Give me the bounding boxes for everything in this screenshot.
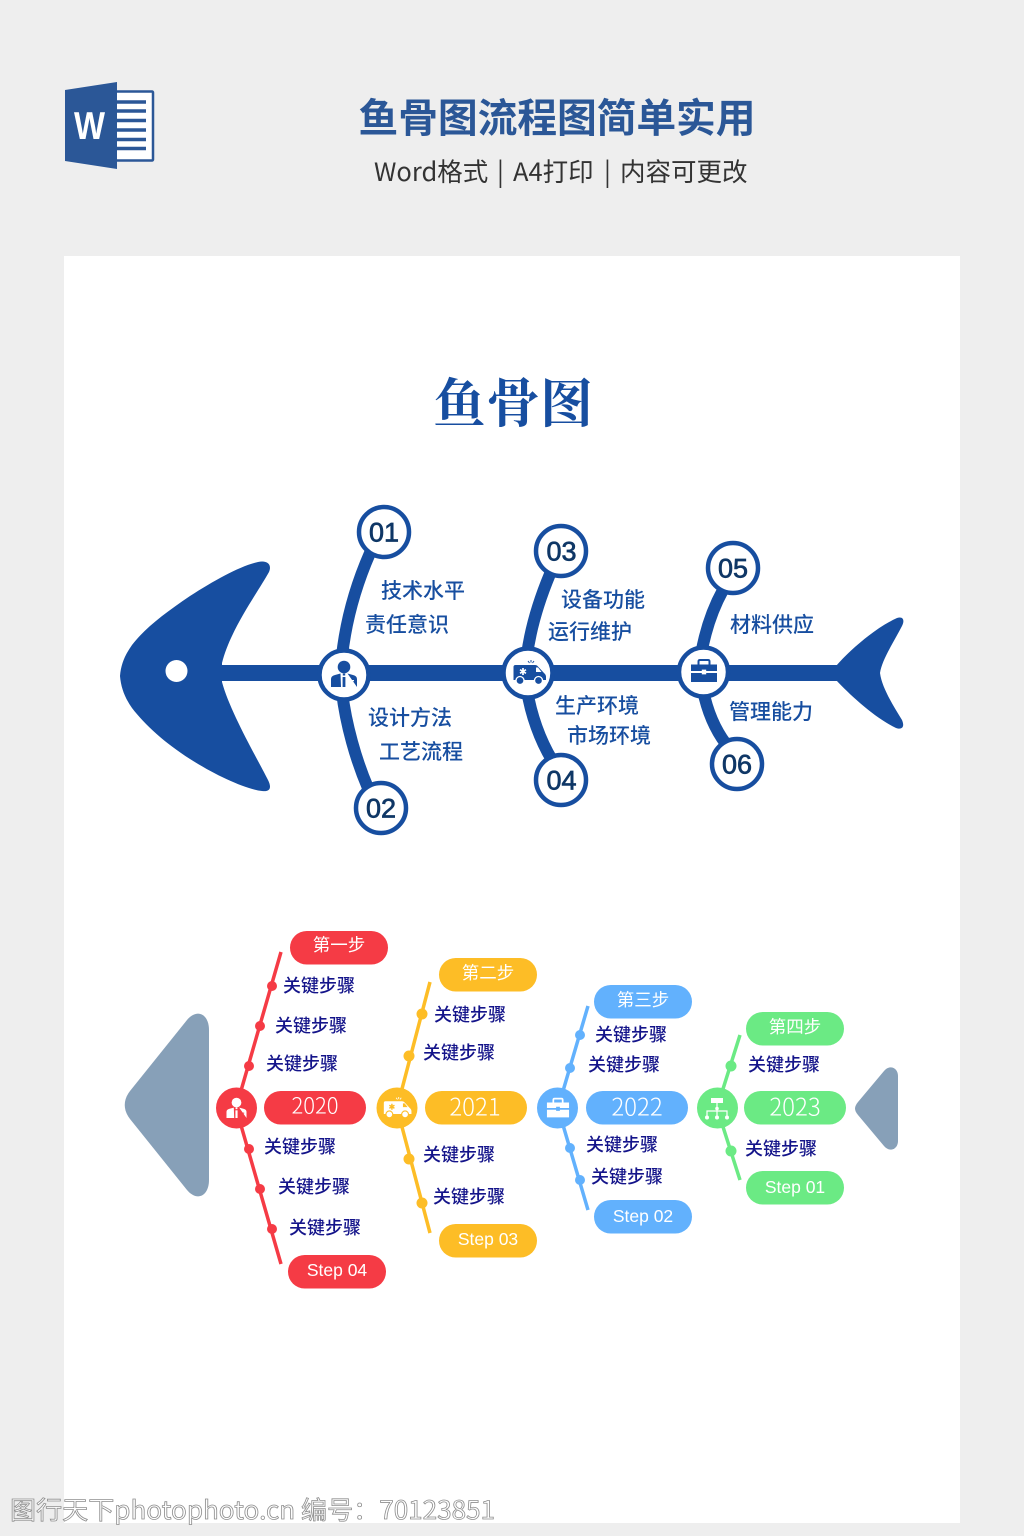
chart: blue fishbone diagram: [120, 507, 903, 833]
labels: rib texts: 设计方法: [368, 702, 452, 732]
rib 04: 04: [546, 766, 577, 796]
labels: rib texts: 责任意识: [365, 609, 449, 639]
rib 04: [527, 690, 586, 805]
group: red 2020: 关键步骤: [278, 1173, 350, 1199]
group: green 2023: Step 01: [765, 1177, 825, 1197]
left grey head triangle: [125, 1014, 209, 1196]
node: person icon: [320, 650, 368, 700]
group: yellow 2021: Step 03: [458, 1229, 518, 1249]
group: blue 2022: [537, 985, 692, 1234]
group: green 2023: 2023: [769, 1088, 821, 1122]
labels: rib texts: 管理能力: [729, 696, 813, 726]
group: yellow 2021: 关键步骤: [433, 1183, 505, 1209]
group: red 2020: 关键步骤: [266, 1050, 338, 1076]
labels: rib texts: 工艺流程: [379, 736, 463, 766]
group: red 2020: 第一步: [313, 935, 365, 955]
rib 01: [342, 507, 409, 656]
labels: rib texts: [365, 575, 814, 766]
rib 03: [527, 526, 586, 655]
group: blue 2022: 关键步骤: [591, 1163, 663, 1189]
group: red 2020: 关键步骤: [289, 1214, 361, 1240]
group: blue 2022: Step 02: [613, 1206, 673, 1226]
main heading: 鱼骨图: 鱼骨图: [433, 362, 593, 438]
labels: rib texts: 运行维护: [548, 616, 632, 646]
group: red 2020: 关键步骤: [275, 1012, 347, 1038]
group: green 2023: 关键步骤: [748, 1051, 820, 1077]
group: yellow 2021: 关键步骤: [423, 1039, 495, 1065]
header subtitle: |: [497, 152, 504, 189]
labels: rib texts: 市场环境: [567, 720, 651, 750]
node: briefcase icon: [679, 648, 728, 696]
group: green 2023: [697, 1012, 846, 1204]
group: green 2023: 关键步骤: [745, 1135, 817, 1161]
labels: rib texts: 设备功能: [561, 584, 645, 614]
rib 02: [342, 692, 406, 833]
group: yellow 2021: 关键步骤: [434, 1001, 506, 1027]
group: yellow 2021: 2021: [449, 1088, 501, 1122]
chart: colourful timeline fishbone: [125, 931, 898, 1288]
fish head: [120, 562, 270, 791]
group: yellow 2021: [376, 958, 537, 1258]
header subtitle: Word格式: [374, 152, 488, 189]
header title: 鱼骨图流程图简单实用: [358, 87, 756, 144]
labels: rib texts: 生产环境: [555, 690, 639, 720]
group: red 2020: [216, 931, 388, 1288]
labels: rib texts: 材料供应: [730, 609, 814, 639]
icon: Word document logo: [65, 82, 153, 169]
group: blue 2022: 第三步: [617, 990, 669, 1010]
rib 05: 05: [718, 554, 748, 584]
group: blue 2022: 关键步骤: [595, 1021, 667, 1047]
labels: rib texts: 技术水平: [381, 575, 465, 605]
white page panel: [64, 256, 960, 1523]
fish tail: [836, 617, 903, 729]
right grey tail triangle: [855, 1067, 898, 1150]
group: yellow 2021: 第二步: [462, 963, 514, 983]
rib 03: 03: [546, 536, 577, 566]
group: blue 2022: 2022: [611, 1088, 663, 1122]
group: red 2020: 关键步骤: [264, 1133, 336, 1159]
rib 06: 06: [722, 750, 752, 780]
group: yellow 2021: 关键步骤: [423, 1141, 495, 1167]
group: red 2020: Step 04: [307, 1260, 367, 1280]
rib 02: 02: [366, 794, 396, 824]
icon: Word document logo: W: [74, 105, 105, 148]
rib 01: 01: [369, 518, 399, 548]
rib 06: [703, 690, 762, 789]
header subtitle: |: [604, 152, 611, 189]
group: blue 2022: 关键步骤: [586, 1131, 658, 1157]
group: blue 2022: 关键步骤: [588, 1051, 660, 1077]
node: ambulance icon: [504, 648, 552, 698]
rib 05: [701, 543, 758, 655]
icon: org chart: [705, 1098, 729, 1120]
group: red 2020: 2020: [291, 1088, 339, 1120]
fish spine: [215, 665, 845, 681]
group: green 2023: 第四步: [769, 1017, 821, 1037]
watermark: 图行天下photophoto.cn 编号：70123851: [10, 1491, 495, 1527]
header subtitle: 内容可更改: [620, 152, 748, 189]
header subtitle: A4打印: [513, 152, 594, 189]
group: red 2020: 关键步骤: [283, 972, 355, 998]
